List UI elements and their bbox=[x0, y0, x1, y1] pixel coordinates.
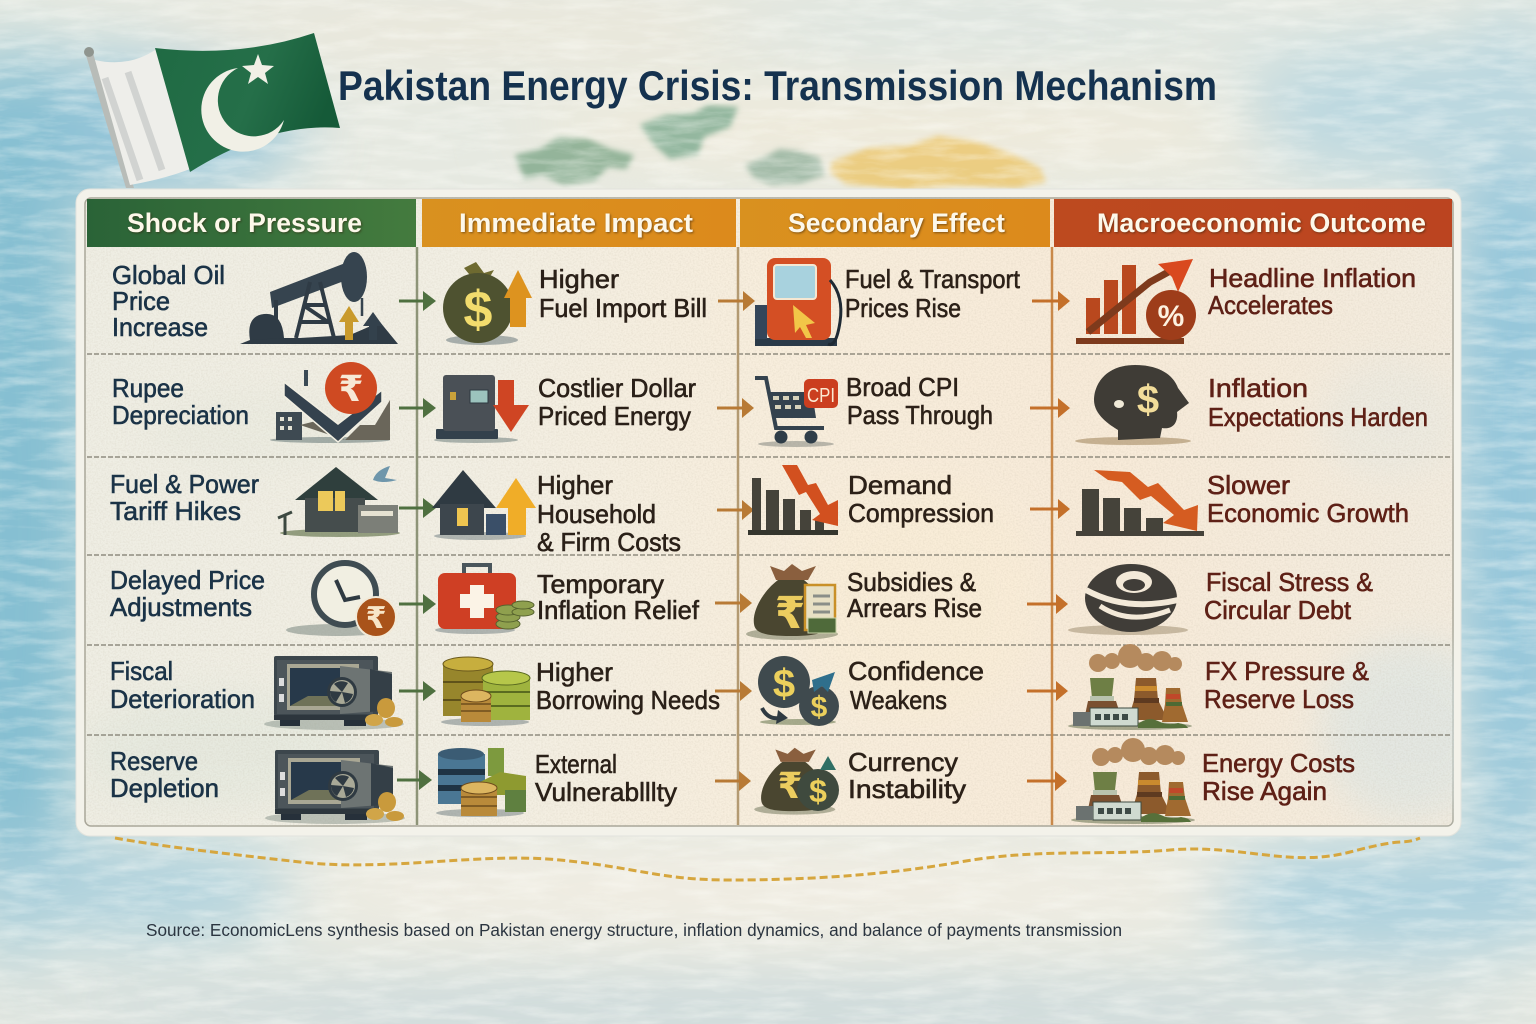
icon: fuel pump bbox=[755, 258, 841, 346]
text: delayed price adjustments: Delayed Price bbox=[110, 565, 265, 595]
text: external vulnerability: Vulnerablllty bbox=[535, 777, 677, 807]
text: broad cpi pass through: Pass Through bbox=[847, 400, 993, 430]
text: rupee depreciation: Depreciation bbox=[112, 400, 249, 430]
text: higher fuel import bill: Higher bbox=[539, 264, 619, 294]
header: immediate impact bbox=[422, 199, 736, 247]
text: higher household and firm costs: Higher bbox=[537, 470, 613, 500]
text: inflation expectations harden: Inflation bbox=[1208, 373, 1308, 403]
text: reserve depletion: Depletion bbox=[110, 773, 219, 803]
text: headline inflation accelerates: Headline Inflation bbox=[1209, 263, 1416, 293]
main table panel bbox=[76, 189, 1500, 836]
text: higher borrowing needs: Borrowing Needs bbox=[536, 685, 720, 715]
icon: clock and rupee coin bbox=[286, 563, 396, 637]
text: fiscal deterioration: Deterioration bbox=[110, 684, 255, 714]
row 3: tariff hikes bbox=[110, 465, 1409, 557]
text: global oil price increase: Global Oil bbox=[112, 260, 225, 290]
icon: falling growth chart bbox=[1076, 470, 1204, 536]
text: fiscal stress and circular debt: Circular Debt bbox=[1204, 595, 1352, 625]
column dividers bbox=[417, 247, 1052, 825]
icon: rupee bag and dollar coin: ₹ bbox=[777, 765, 803, 806]
text: subsidies and arrears rise: Subsidies & bbox=[847, 567, 976, 597]
icon: rupee bag with bills: ₹ bbox=[775, 589, 805, 638]
row 6: reserve depletion bbox=[110, 738, 1355, 824]
text: global oil price increase: Price bbox=[112, 286, 170, 316]
icon: rupee bag and dollar coin bbox=[754, 748, 839, 815]
icon: open safe with coins bbox=[265, 750, 405, 824]
icon: shopping cart cpi bbox=[755, 378, 838, 447]
header: macroeconomic outcome bbox=[1054, 199, 1452, 247]
icon: money bag with rising arrow: $ bbox=[464, 281, 493, 339]
text: currency instability: Currency bbox=[848, 747, 958, 777]
text: fx pressure and reserve loss: FX Pressure & bbox=[1205, 656, 1369, 686]
icon: inflation chart with percent bbox=[1076, 259, 1196, 344]
text: demand compression: Compression bbox=[848, 498, 994, 528]
text: higher fuel import bill: Fuel Import Bill bbox=[539, 293, 707, 323]
text: external vulnerability: External bbox=[535, 749, 617, 779]
text: global oil price increase: Increase bbox=[112, 312, 208, 342]
icon: house with utility bbox=[278, 466, 400, 537]
text: demand compression: Demand bbox=[848, 470, 952, 500]
text: headline inflation accelerates: Accelerates bbox=[1208, 290, 1333, 320]
text: rupee depreciation: Rupee bbox=[112, 373, 184, 403]
text: higher household and firm costs: Household bbox=[537, 499, 656, 529]
text: costlier dollar priced energy: Costlier Dollar bbox=[538, 373, 696, 403]
icon: oil pumpjack bbox=[240, 252, 398, 344]
text: confidence weakens: Confidence bbox=[848, 656, 984, 686]
icon: dollar coins exchange: $ bbox=[773, 662, 795, 706]
icon: clock and rupee coin: ₹ bbox=[366, 602, 386, 635]
icon: money bag with rising arrow bbox=[443, 262, 532, 345]
title: Pakistan Energy Crisis: Transmission Mechanism bbox=[338, 62, 1217, 109]
text: broad cpi pass through: Broad CPI bbox=[846, 372, 959, 402]
text: fuel and power tariff hikes: Fuel & Power bbox=[110, 469, 259, 499]
text: fx pressure and reserve loss: Reserve Loss bbox=[1204, 684, 1354, 714]
header: secondary effect: Secondary Effect bbox=[788, 208, 1005, 238]
icon: stacks of coins bbox=[441, 657, 530, 726]
text: fuel and power tariff hikes: Tariff Hikes bbox=[110, 496, 241, 526]
text: fiscal deterioration: Fiscal bbox=[110, 656, 173, 686]
text: higher borrowing needs: Higher bbox=[536, 657, 613, 687]
text: higher household and firm costs: & Firm Costs bbox=[537, 527, 681, 557]
icon: inflation chart with percent: % bbox=[1158, 300, 1184, 333]
text: subsidies and arrears rise: Arrears Rise bbox=[847, 593, 982, 623]
text: fuel and transport prices rise: Fuel & Transport bbox=[845, 264, 1021, 294]
arrows: immediate to secondary bbox=[715, 291, 755, 791]
text: slower economic growth: Slower bbox=[1207, 470, 1290, 500]
icon: shopping cart cpi: CPI bbox=[807, 385, 835, 407]
header: shock or pressure bbox=[87, 199, 416, 247]
text: fuel and transport prices rise: Prices Rise bbox=[845, 293, 961, 323]
header: shock or pressure: Shock or Pressure bbox=[127, 208, 362, 238]
icon: dollar coins exchange bbox=[758, 656, 839, 726]
text: fiscal stress and circular debt: Fiscal Stress & bbox=[1206, 567, 1373, 597]
arrows: shock to immediate bbox=[397, 291, 436, 790]
text: confidence weakens: Weakens bbox=[850, 685, 947, 715]
text: delayed price adjustments: Adjustments bbox=[110, 592, 252, 622]
icon: house with rising arrow bbox=[432, 470, 536, 540]
icon: dollar coins exchange: $ bbox=[811, 691, 828, 724]
icon: first aid kit with coins bbox=[435, 565, 534, 634]
source note: Source: EconomicLens synthesis based on Pakistan energy structure, inflation dynamics, and balance of payments transmission bbox=[146, 920, 1122, 940]
icon: rupee falling over city: ₹ bbox=[338, 368, 364, 409]
icon: head with dollar sign: $ bbox=[1137, 378, 1159, 422]
row 5: fiscal deterioration bbox=[110, 644, 1369, 730]
text: temporary inflation relief: Inflation Relief bbox=[537, 595, 700, 625]
icon: power plant bbox=[1071, 738, 1195, 824]
row 4: delayed price adjustments bbox=[110, 563, 1373, 640]
icon: barrels and cash bbox=[436, 748, 526, 817]
decorative route bbox=[115, 838, 1420, 880]
icon: rupee bag and dollar coin: $ bbox=[809, 773, 827, 809]
icon: head with dollar sign bbox=[1075, 365, 1191, 445]
header: immediate impact: Immediate Impact bbox=[459, 208, 693, 238]
header: macroeconomic outcome: Macroeconomic Outcome bbox=[1097, 208, 1426, 238]
icon: falling bar chart bbox=[748, 465, 838, 535]
text: reserve depletion: Reserve bbox=[110, 746, 198, 776]
text: energy costs rise again: Energy Costs bbox=[1202, 748, 1355, 778]
row 2: rupee depreciation bbox=[112, 362, 1428, 447]
icon: circular debt loop bbox=[1068, 564, 1188, 635]
text: currency instability: Instability bbox=[848, 774, 966, 804]
icon: fuel terminal with down arrow bbox=[434, 375, 529, 443]
icon: open safe with coins bbox=[264, 656, 404, 730]
text: inflation expectations harden: Expectations Harden bbox=[1208, 402, 1428, 432]
text: costlier dollar priced energy: Priced Energy bbox=[538, 401, 691, 431]
text: slower economic growth: Economic Growth bbox=[1207, 498, 1409, 528]
flag of Pakistan bbox=[84, 33, 340, 188]
icon: rupee bag with bills bbox=[746, 564, 838, 640]
text: energy costs rise again: Rise Again bbox=[1202, 776, 1327, 806]
arrows: secondary to outcome bbox=[1027, 291, 1070, 791]
icon: rupee falling over city bbox=[270, 362, 390, 443]
row 1: global oil price bbox=[112, 252, 1416, 346]
text: temporary inflation relief: Temporary bbox=[537, 569, 664, 599]
header: secondary effect bbox=[740, 199, 1050, 247]
row dividers bbox=[87, 354, 1452, 735]
icon: power plant bbox=[1068, 644, 1192, 730]
